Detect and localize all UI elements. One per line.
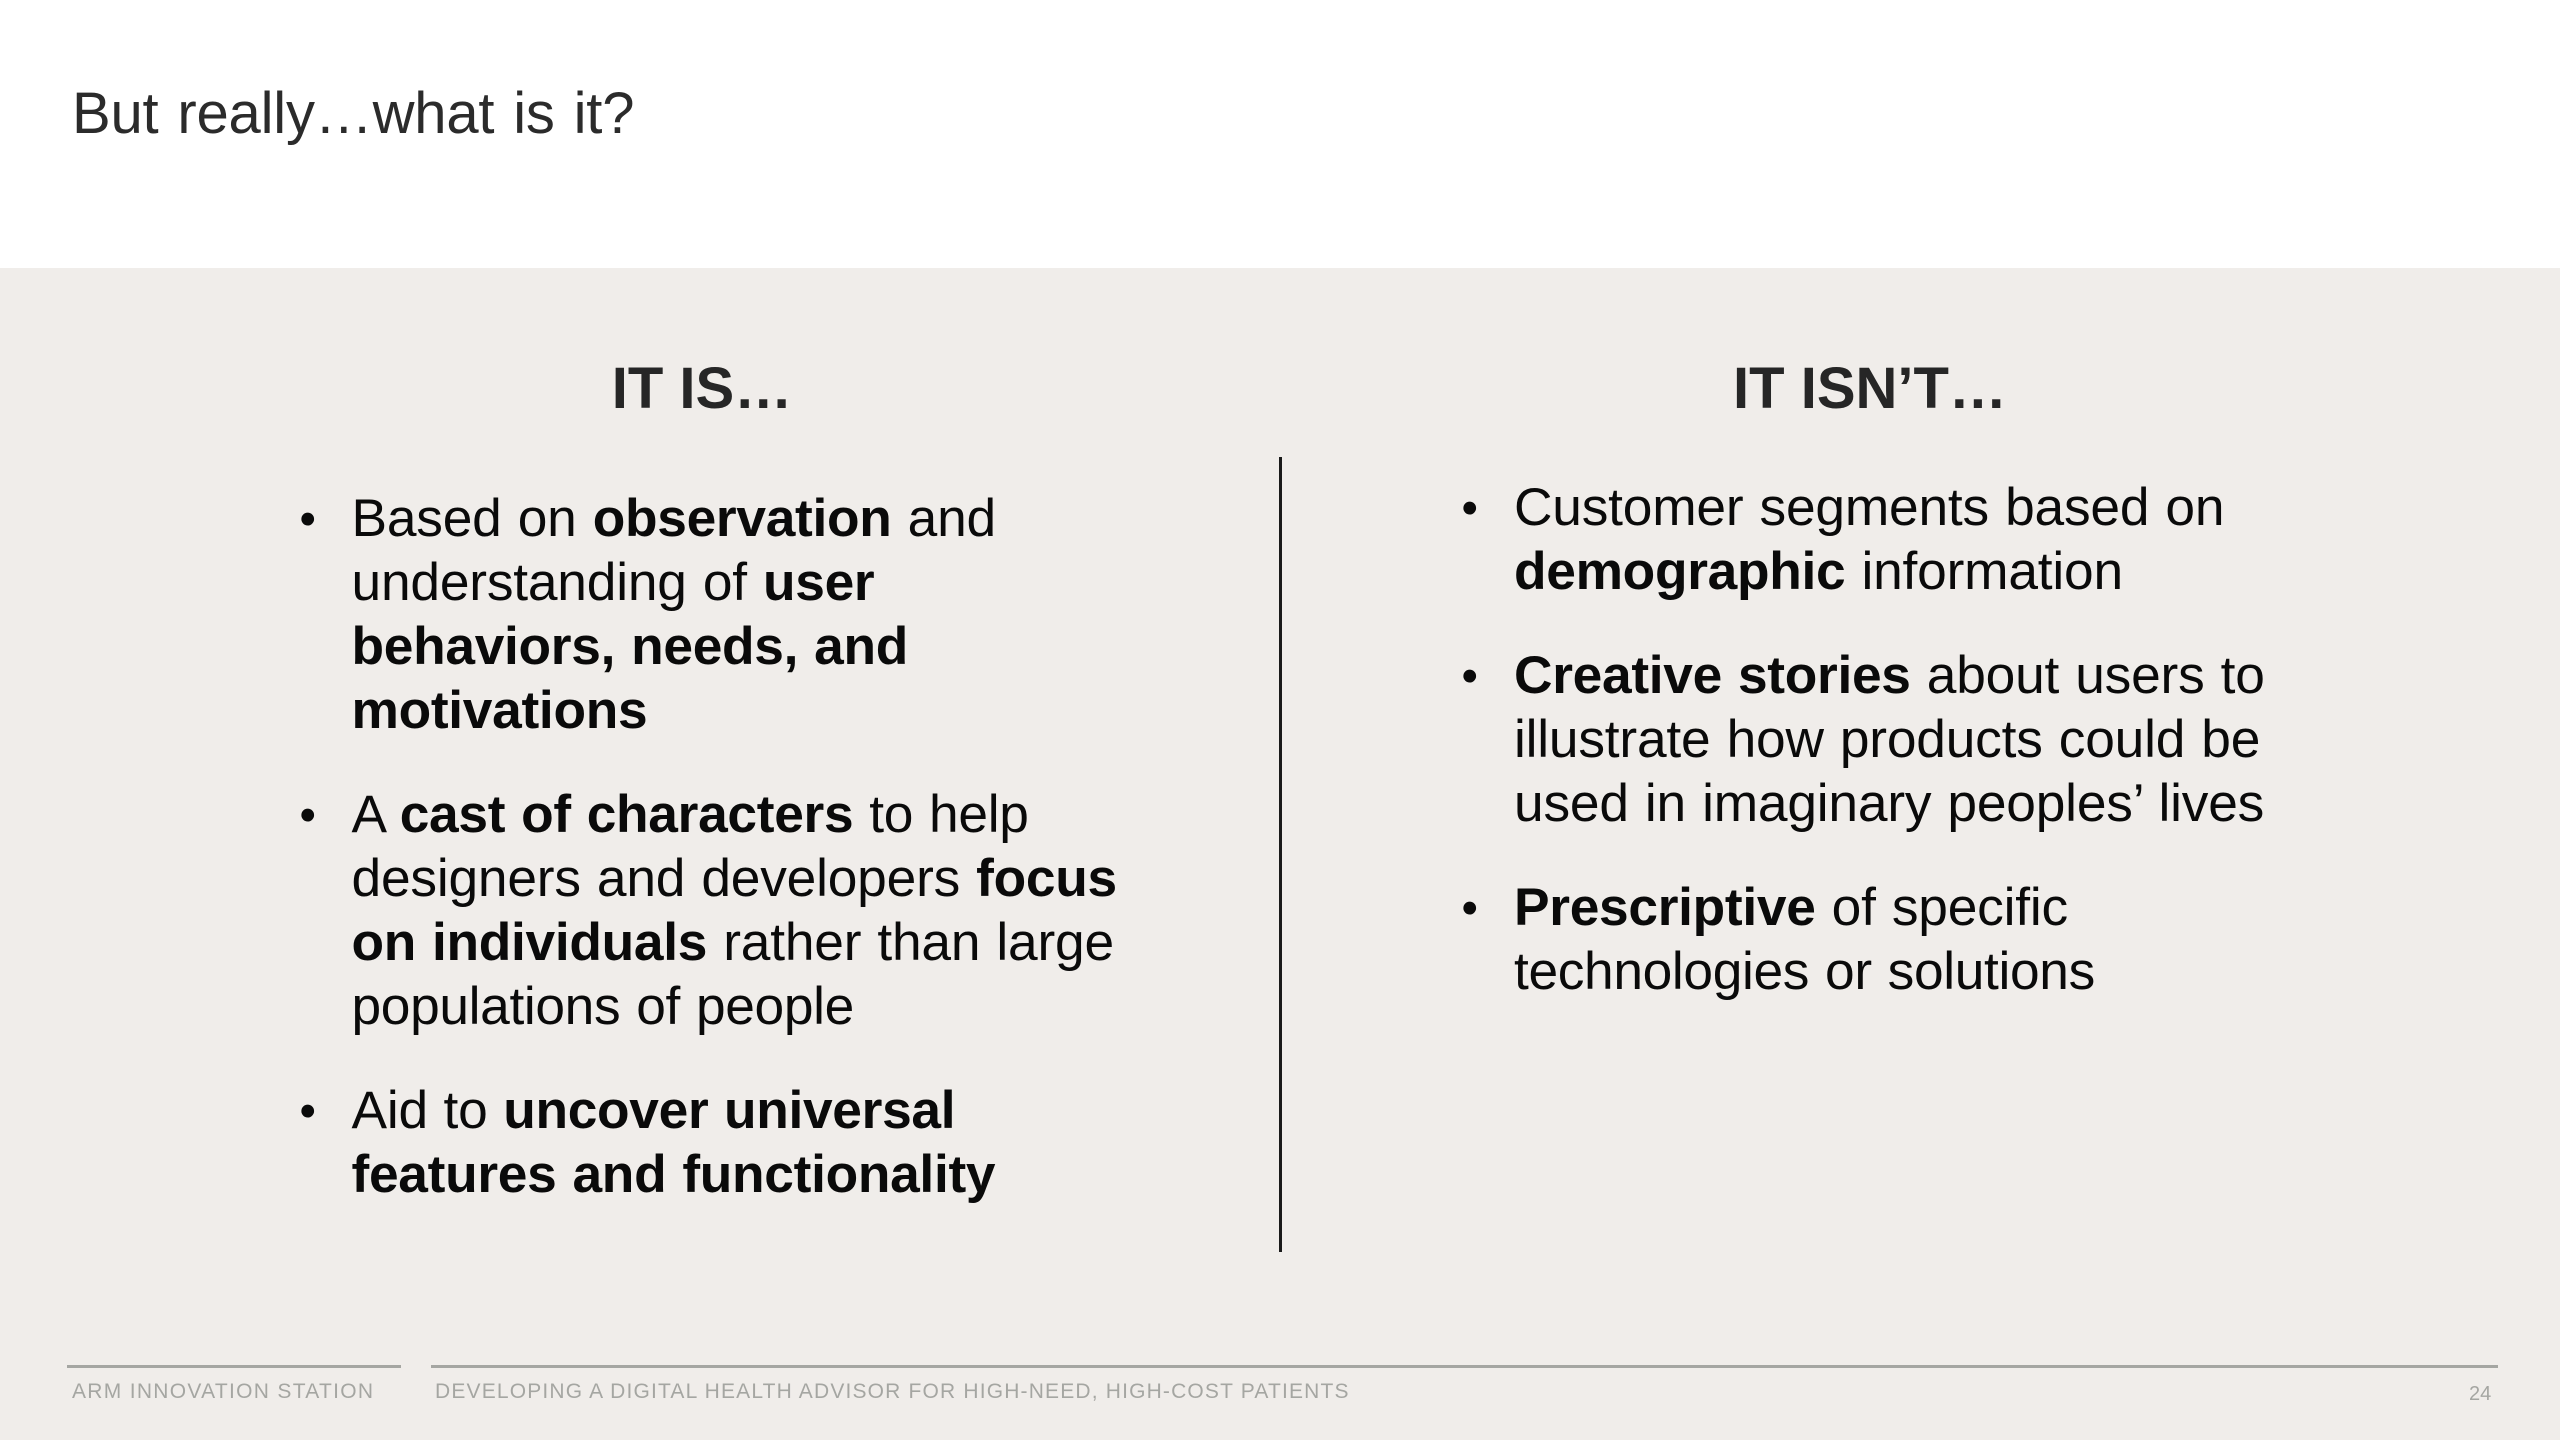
bullet item 3 bbox=[300, 1081, 996, 1204]
bullet item 3 bbox=[1462, 878, 2095, 1001]
bullet item 1: Based on observation and bbox=[352, 489, 996, 548]
bullet item 1: Customer segments based on bbox=[1514, 478, 2224, 537]
bullet item 1: understanding of user bbox=[352, 553, 874, 612]
footer rule: left bbox=[67, 1365, 401, 1368]
bullet item 3: Aid to uncover universal bbox=[352, 1081, 955, 1140]
footer rule: right bbox=[431, 1365, 2498, 1368]
heading: it isn't: IT ISN’T… bbox=[1733, 356, 2007, 421]
bullet item 2 bbox=[300, 785, 1117, 1036]
footer label: project title: DEVELOPING A DIGITAL HEALTH ADVISOR FOR HIGH-NEED, HIGH-COST PATIENTS bbox=[435, 1380, 1350, 1402]
title: But really…what is it? bbox=[72, 81, 634, 146]
bullet item 1 bbox=[1462, 478, 2224, 601]
bullet item 3: • bbox=[300, 1084, 316, 1137]
heading: it is: IT IS… bbox=[612, 356, 792, 421]
bullet item 3: features and functionality bbox=[352, 1145, 995, 1204]
bullet item 1: behaviors, needs, and bbox=[352, 617, 908, 676]
footer label: organisation: ARM INNOVATION STATION bbox=[72, 1380, 374, 1402]
bullet item 2: A cast of characters to help bbox=[352, 785, 1029, 844]
bullet item 1: demographic information bbox=[1514, 542, 2123, 601]
divider: vertical line between columns bbox=[1279, 457, 1282, 1252]
bullet item 2: • bbox=[300, 788, 316, 841]
bullet item 3: Prescriptive of specific bbox=[1514, 878, 2068, 937]
page number: 24 bbox=[2469, 1382, 2491, 1404]
bullet item 2: • bbox=[1462, 649, 1478, 702]
bullet item 2: designers and developers focus bbox=[352, 849, 1117, 908]
bullet item 2: Creative stories about users to bbox=[1514, 646, 2265, 705]
bullet item 1: • bbox=[300, 492, 316, 545]
bullet item 1: • bbox=[1462, 481, 1478, 534]
bullet item 2: on individuals rather than large bbox=[352, 913, 1114, 972]
bullet item 1 bbox=[300, 489, 996, 740]
bullet item 3: technologies or solutions bbox=[1514, 942, 2095, 1001]
bullet item 2: populations of people bbox=[352, 977, 854, 1036]
bullet item 2: illustrate how products could be bbox=[1514, 710, 2260, 769]
text block: it is list bbox=[300, 489, 1117, 1204]
bullet item 1: motivations bbox=[352, 681, 647, 740]
bullet item 3: • bbox=[1462, 881, 1478, 934]
bullet item 2: used in imaginary peoples’ lives bbox=[1514, 774, 2264, 833]
text block: it isn't list bbox=[1462, 478, 2265, 1001]
bullet item 2 bbox=[1462, 646, 2265, 833]
